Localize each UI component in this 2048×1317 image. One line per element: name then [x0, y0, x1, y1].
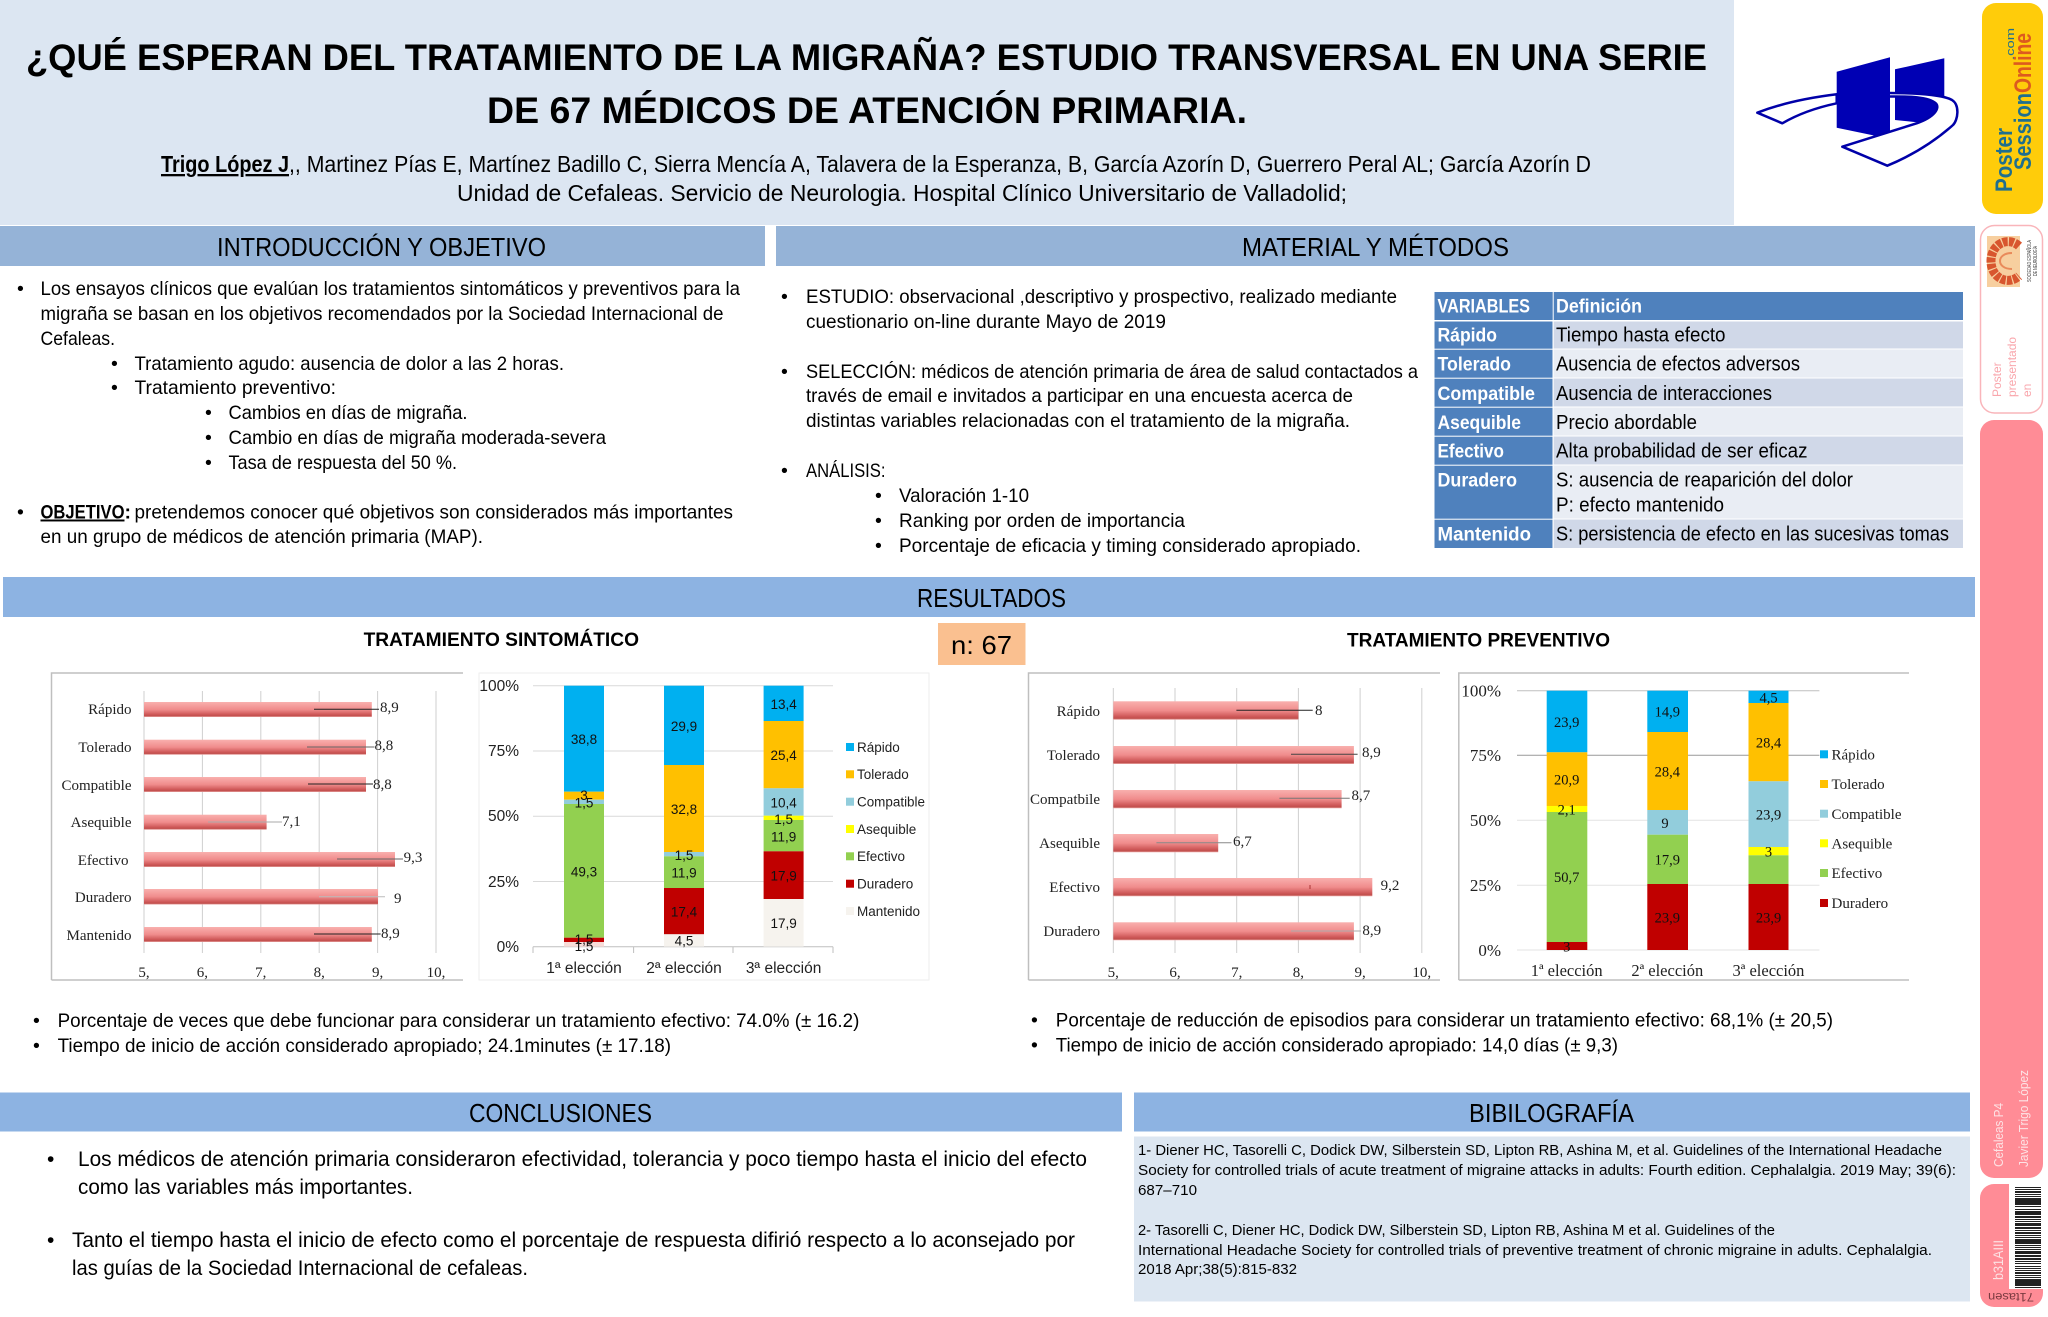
text block: conclusiones: Los médicos de atención primaria consideraron efectividad, tolerancia y poco tiempo hasta el inicio del efecto — [78, 1148, 1087, 1171]
bar chart: preventivo valoración: Duradero — [1043, 924, 1100, 940]
stacked bar chart: preventivo elección: 2,1 — [1558, 803, 1576, 819]
stacked bar chart: sintomático elección: 1,5 — [774, 812, 793, 827]
authors: Trigo López J — [161, 151, 289, 177]
stacked bar chart: sintomático elección: 29,9 — [671, 719, 697, 734]
text block: referencias — [1134, 1136, 1970, 1302]
table: variables: Alta probabilidad de ser eficaz — [1556, 441, 1808, 463]
panel: introducción y objetivo — [0, 226, 765, 548]
sidebar: poster session online badge: Session — [2010, 93, 2037, 170]
text block: introducción — [17, 278, 740, 548]
stacked bar chart: sintomático elección: 75% — [488, 743, 519, 760]
text block: introducción: • — [205, 402, 212, 424]
sidebar: session and author tab: Cefaleas P4 — [1991, 1103, 2006, 1167]
text block: referencias: 687–710 — [1138, 1183, 1197, 1199]
table: variables: Compatible — [1438, 383, 1535, 405]
text block: conclusiones: • — [47, 1148, 54, 1171]
callout: n 67 — [938, 623, 1026, 665]
text block: métodos: • — [781, 460, 788, 482]
sidebar: code tab with barcode: b31AIII — [1990, 1240, 2006, 1280]
sidebar: session and author tab: Javier Trigo López — [2016, 1070, 2031, 1167]
text block: introducción: Cambios en días de migraña. — [228, 402, 468, 424]
text: poster presentado en: en — [2020, 384, 2034, 397]
table: variables: Ausencia de interacciones — [1556, 383, 1772, 405]
stacked bar chart: sintomático elección: 49,3 — [571, 865, 597, 880]
text block: resultados preventivo: • — [1031, 1035, 1038, 1057]
sidebar: code tab with barcode — [1980, 1184, 2043, 1307]
bar chart: sintomático valoración: 8,8 — [374, 738, 393, 754]
stacked bar chart: preventivo elección: 3 — [1765, 845, 1772, 861]
icon: brain logo — [1987, 236, 2039, 287]
table: variables: S: persistencia de efecto en las sucesivas tomas — [1556, 524, 1949, 546]
text block: conclusiones: Tanto el tiempo hasta el inicio de efecto como el porcentaje de respuesta difirió respecto a lo aconsejado por — [72, 1229, 1075, 1252]
stacked bar chart: sintomático elección: 1,5 — [675, 848, 693, 863]
table: variables: VARIABLES — [1438, 296, 1530, 318]
bar chart: sintomático valoración: 6, — [197, 965, 208, 981]
heading: bibliografía: BIBILOGRAFÍA — [1469, 1098, 1635, 1128]
legend: Efectivo — [1832, 866, 1882, 882]
stacked bar chart: preventivo elección: 2ª elección — [1631, 961, 1703, 980]
stacked bar chart: preventivo elección: 50% — [1470, 811, 1501, 830]
text block: introducción: • — [111, 353, 118, 375]
bar chart: preventivo valoración: 9, — [1354, 965, 1366, 981]
stacked bar chart: preventivo elección: 1ª elección — [1531, 961, 1603, 980]
bar chart: preventivo valoración: 8, — [1293, 965, 1304, 981]
stacked bar chart: sintomático elección: 3ª elección — [746, 960, 821, 977]
text: poster presentado en: Poster — [1990, 362, 2004, 397]
stacked bar chart: sintomático elección: 2ª elección — [646, 960, 722, 977]
table: variables: Definición — [1556, 296, 1642, 318]
bar chart: preventivo valoración: Efectivo — [1049, 880, 1100, 896]
stacked bar chart: preventivo elección: 23,9 — [1756, 910, 1781, 926]
stacked bar chart: preventivo elección: 23,9 — [1554, 715, 1579, 731]
bar chart: sintomático valoración: Tolerado — [78, 740, 132, 756]
icon: brain logo: SOCIEDAD ESPAÑOLA — [2026, 240, 2033, 282]
bar chart: preventivo valoración: Rápido — [1057, 704, 1100, 720]
stacked bar chart: sintomático elección: 17,9 — [770, 869, 797, 884]
bar chart: sintomático valoración — [52, 673, 463, 981]
bar chart: preventivo valoración: 6,7 — [1233, 834, 1252, 850]
table: variables: Asequible — [1438, 412, 1521, 434]
stacked bar chart: sintomático elección: 3 — [580, 788, 588, 803]
stacked bar chart: sintomático elección: 25% — [488, 874, 519, 891]
table: variables: Efectivo — [1438, 441, 1504, 463]
stacked bar chart: sintomático elección: 17,9 — [770, 916, 797, 931]
stacked bar chart: sintomático elección: 11,9 — [771, 830, 796, 845]
text block: referencias: International Headache Society for controlled trials of preventive treatment of chronic migraine in adults. Cephalalgia. — [1138, 1243, 1932, 1259]
stacked bar chart: sintomático elección: 11,9 — [671, 866, 697, 881]
stacked bar chart: sintomático elección: 1,5 — [575, 939, 593, 954]
stacked bar chart: sintomático elección: 25,4 — [770, 748, 797, 763]
heading: introducción: INTRODUCCIÓN Y OBJETIVO — [217, 232, 546, 262]
heading: conclusiones: CONCLUSIONES — [469, 1098, 652, 1128]
text block: métodos: • — [875, 485, 882, 507]
text block: métodos: cuestionario on-line durante Mayo de 2019 — [806, 311, 1166, 333]
bar chart: sintomático valoración: Mantenido — [66, 928, 132, 944]
table: variables: Tolerado — [1438, 354, 1511, 376]
text block: conclusiones: • — [47, 1229, 54, 1252]
title: DE 67 MÉDICOS DE ATENCIÓN PRIMARIA. — [487, 89, 1247, 131]
bar chart: sintomático valoración: 9, — [372, 965, 383, 981]
panel: bibliografía — [1134, 1092, 1970, 1302]
legend: Efectivo — [857, 849, 905, 864]
sidebar: poster session online badge: .com — [2005, 28, 2017, 60]
stacked bar chart: sintomático elección: 10,4 — [770, 796, 797, 811]
bar chart: sintomático valoración: 10, — [427, 965, 445, 981]
text block: introducción: pretendemos conocer qué objetivos son considerados más importantes — [134, 502, 733, 524]
bar chart: sintomático valoración: 5, — [138, 965, 150, 981]
bar chart: preventivo valoración: 6, — [1169, 965, 1181, 981]
legend: Tolerado — [1832, 777, 1885, 793]
table: variables: Ausencia de efectos adversos — [1556, 354, 1800, 376]
heading: material y métodos — [776, 226, 1975, 266]
sidebar: session and author tab — [1980, 420, 2043, 1178]
text block: introducción: Los ensayos clínicos que evalúan los tratamientos sintomáticos y preventivos para la — [40, 278, 740, 300]
bar chart: sintomático valoración: 8,9 — [380, 700, 399, 716]
legend: Rápido — [857, 740, 900, 755]
stacked bar chart: sintomático elección: 1,5 — [575, 932, 593, 947]
sidebar: poster session online badge — [1982, 3, 2043, 214]
bar chart: sintomático valoración: Asequible — [71, 815, 132, 831]
text block: métodos: SELECCIÓN: médicos de atención primaria de área de salud contactados a — [806, 360, 1418, 383]
text block: métodos: Ranking por orden de importancia — [899, 510, 1185, 532]
text block: métodos: distintas variables relacionadas con el tratamiento de la migraña. — [806, 410, 1350, 432]
table: variables: Precio abordable — [1556, 412, 1697, 434]
title — [26, 36, 1707, 131]
bar chart: preventivo valoración: Asequible — [1039, 836, 1100, 852]
text block: introducción: migraña se basan en los objetivos recomendados por la Sociedad Internacional de — [40, 303, 724, 325]
stacked bar chart: sintomático elección: 1ª elección — [546, 960, 622, 977]
text block: introducción: : — [124, 502, 131, 524]
text block: introducción: OBJETIVO — [40, 502, 124, 524]
text block: métodos: • — [781, 361, 788, 383]
legend: Compatible — [857, 795, 925, 810]
stacked bar chart: sintomático elección: 17,4 — [671, 905, 698, 920]
stacked bar chart: sintomático elección: 32,8 — [671, 802, 697, 817]
bar chart: sintomático valoración: 8, — [314, 965, 325, 981]
sidebar: code tab with barcode: 71tasen — [1988, 1290, 2034, 1304]
stacked bar chart: sintomático elección: 13,4 — [770, 697, 797, 712]
legend: Asequible — [1832, 836, 1893, 852]
table: variables: P: efecto mantenido — [1556, 495, 1724, 517]
icon: brain logo: DE NEUROLOGÍA — [2032, 246, 2039, 276]
panel: conclusiones — [0, 1092, 1122, 1280]
bar chart: sintomático valoración: Efectivo — [78, 853, 128, 869]
legend: Tolerado — [857, 767, 909, 782]
bar chart: sintomático valoración: 9,3 — [404, 850, 422, 866]
text block: referencias: 2- Tasorelli C, Diener HC, Dodick DW, Silberstein SD, Lipton RB, Ashina M et al. Guidelines of the — [1138, 1223, 1775, 1239]
heading: introducción — [0, 226, 765, 266]
heading: resultados: RESULTADOS — [917, 583, 1066, 613]
heading: bibliografía — [1134, 1092, 1970, 1132]
text block: resultados preventivo: Tiempo de inicio de acción considerado apropiado: 14,0 días (± 9,3) — [1056, 1035, 1618, 1057]
text block: resultados sintomático: Tiempo de inicio de acción considerado apropiado; 24.1minutes (± 17.18) — [58, 1035, 671, 1057]
sidebar: presented at card — [1980, 226, 2042, 413]
heading: conclusiones — [0, 1092, 1122, 1132]
text block: métodos: ANÁLISIS: — [806, 459, 886, 482]
stacked bar chart: preventivo elección: 3ª elección — [1733, 961, 1804, 980]
callout: n 67: n: 67 — [951, 630, 1012, 660]
bar chart: sintomático valoración: 9 — [394, 891, 402, 907]
text block: introducción: • — [17, 502, 24, 524]
bar chart: preventivo valoración: Tolerado — [1047, 748, 1100, 764]
text block: introducción: • — [205, 452, 212, 474]
text block: resultados sintomático — [33, 1010, 859, 1057]
text block: introducción: • — [205, 427, 212, 449]
text block: métodos: • — [875, 535, 882, 557]
bar chart: sintomático valoración: 8,9 — [381, 926, 400, 942]
text block: introducción: • — [17, 278, 24, 300]
text: poster presentado en — [1990, 337, 2034, 397]
authors — [161, 151, 1591, 206]
stacked bar chart: sintomático elección — [479, 673, 929, 980]
stacked bar chart: sintomático elección: 0% — [497, 939, 519, 956]
stacked bar chart: preventivo elección: 25% — [1470, 876, 1501, 895]
bar chart: preventivo valoración: 8,9 — [1362, 745, 1381, 761]
heading: material y métodos: MATERIAL Y MÉTODOS — [1242, 232, 1509, 262]
bar chart: preventivo valoración: 5, — [1108, 965, 1119, 981]
barcode — [2015, 1187, 2041, 1288]
text block: resultados preventivo: Porcentaje de reducción de episodios para considerar un tratamiento efectivo: 68,1% (± 20,5) — [1056, 1010, 1833, 1032]
stacked bar chart: preventivo elección: 14,9 — [1655, 705, 1680, 721]
text block: conclusiones: las guías de la Sociedad Internacional de cefaleas. — [72, 1257, 528, 1280]
bar chart: sintomático valoración: 7, — [255, 965, 266, 981]
text block: resultados sintomático: • — [33, 1010, 40, 1032]
bar chart: preventivo valoración: Compatbile — [1030, 792, 1100, 808]
stacked bar chart: sintomático elección: 100% — [479, 678, 519, 695]
bar chart: preventivo valoración: 7, — [1231, 965, 1242, 981]
authors: Unidad de Cefaleas. Servicio de Neurologia. Hospital Clínico Universitario de Valladolid; — [457, 180, 1347, 206]
text block: introducción: Tratamiento preventivo: — [134, 377, 336, 399]
text: poster presentado en: presentado — [2005, 337, 2019, 397]
heading: tratamiento preventivo: TRATAMIENTO PREVENTIVO — [1347, 630, 1610, 652]
stacked bar chart: preventivo elección: 9 — [1661, 816, 1669, 832]
table: variables: Rápido — [1438, 325, 1497, 347]
table: variables: Mantenido — [1438, 524, 1531, 546]
icon: hospital logo — [1757, 57, 1957, 166]
text block: conclusiones: como las variables más importantes. — [78, 1176, 413, 1199]
bar chart: sintomático valoración: Rápido — [88, 702, 132, 718]
bar chart: preventivo valoración: 9,2 — [1381, 878, 1399, 894]
text block: introducción: Cambio en días de migraña moderada-severa — [228, 427, 606, 449]
bar chart: sintomático valoración: Duradero — [75, 890, 132, 906]
text block: métodos: Porcentaje de eficacia y timing considerado apropiado. — [899, 535, 1361, 557]
text block: métodos: • — [781, 286, 788, 308]
header panel — [0, 0, 1734, 225]
text block: introducción: • — [111, 377, 118, 399]
sidebar: poster session online badge: Poster — [1991, 128, 2018, 192]
stacked bar chart: preventivo elección: 17,9 — [1655, 853, 1680, 869]
legend: Rápido — [1832, 748, 1875, 764]
stacked bar chart: sintomático elección: 50% — [488, 808, 519, 825]
table: variables: S: ausencia de reaparición del dolor — [1556, 470, 1853, 492]
stacked bar chart: preventivo elección: 20,9 — [1554, 773, 1579, 789]
stacked bar chart: sintomático elección: 4,5 — [675, 934, 693, 949]
heading: tratamiento sintomático: TRATAMIENTO SINTOMÁTICO — [364, 628, 639, 651]
legend: Asequible — [857, 822, 916, 837]
bar chart: preventivo valoración — [1028, 673, 1440, 981]
stacked bar chart: sintomático elección: 38,8 — [571, 732, 597, 747]
authors: ,, Martinez Pías E, Martínez Badillo C, Sierra Mencía A, Talavera de la Esperanza, B, García Azorín D, Guerrero Peral AL; García Azorín D — [289, 151, 1591, 177]
stacked bar chart: preventivo elección: 23,9 — [1655, 910, 1680, 926]
stacked bar chart: preventivo elección: 4,5 — [1759, 690, 1778, 706]
table: variables: Duradero — [1438, 470, 1517, 492]
text block: introducción: Tasa de respuesta del 50 %. — [228, 452, 457, 474]
bar chart: preventivo valoración: 8 — [1315, 703, 1322, 719]
legend: Compatible — [1832, 807, 1902, 823]
text block: resultados sintomático: • — [33, 1035, 40, 1057]
text block: conclusiones — [47, 1148, 1087, 1280]
text block: resultados preventivo — [1031, 1010, 1833, 1057]
stacked bar chart: preventivo elección: 23,9 — [1756, 808, 1781, 824]
stacked bar chart: sintomático elección: 1,5 — [575, 796, 593, 811]
text block: introducción: Cefaleas. — [40, 328, 115, 350]
bar chart: sintomático valoración: 7,1 — [282, 814, 301, 830]
text block: referencias: Society for controlled trials of acute treatment of migraine attacks in adults: Fourth edition. Cephalalgia. 2019 May; 39(6): — [1138, 1163, 1956, 1179]
title: ¿QUÉ ESPERAN DEL TRATAMIENTO DE LA MIGRAÑA? ESTUDIO TRANSVERSAL EN UNA SERIE — [26, 36, 1707, 78]
stacked bar chart: preventivo elección: 3 — [1563, 940, 1570, 956]
legend — [846, 740, 925, 919]
text block: métodos: Valoración 1-10 — [899, 485, 1029, 507]
stacked bar chart: preventivo elección: 50,7 — [1554, 870, 1579, 886]
bar chart: preventivo valoración: 8,7 — [1352, 788, 1371, 804]
text block: métodos — [781, 286, 1418, 557]
legend: Duradero — [1832, 896, 1888, 912]
text block: introducción: en un grupo de médicos de atención primaria (MAP). — [40, 526, 483, 548]
heading: resultados — [3, 577, 1975, 617]
stacked bar chart: preventivo elección: 100% — [1461, 682, 1501, 700]
stacked bar chart: preventivo elección: 75% — [1470, 746, 1501, 765]
text block: resultados sintomático: Porcentaje de veces que debe funcionar para considerar un tratamiento efectivo: 74.0% (± 16.2) — [58, 1010, 859, 1032]
bar chart: sintomático valoración: 8,8 — [373, 777, 392, 793]
table: variables: Tiempo hasta efecto — [1556, 325, 1726, 347]
text block: resultados preventivo: • — [1031, 1010, 1038, 1032]
text block: métodos: • — [875, 510, 882, 532]
panel: material y métodos — [776, 226, 1975, 557]
bar chart: preventivo valoración: 8,9 — [1362, 923, 1381, 939]
text block: introducción: Tratamiento agudo: ausencia de dolor a las 2 horas. — [134, 353, 564, 375]
stacked bar chart: preventivo elección: 0% — [1478, 941, 1501, 960]
stacked bar chart: preventivo elección — [1459, 673, 1909, 980]
table: variables — [1434, 292, 1963, 548]
sidebar: poster session online badge: Online — [2010, 33, 2037, 93]
legend: Duradero — [857, 877, 913, 892]
bar chart: preventivo valoración: 10, — [1412, 965, 1431, 981]
stacked bar chart: preventivo elección: 28,4 — [1655, 765, 1681, 781]
bar chart: sintomático valoración: Compatible — [62, 778, 132, 794]
legend — [1820, 748, 1902, 912]
stacked bar chart: preventivo elección: 28,4 — [1756, 736, 1782, 752]
text block: métodos: ESTUDIO: observacional ,descriptivo y prospectivo, realizado mediante — [806, 286, 1397, 308]
text block: referencias: 2018 Apr;38(5):815-832 — [1138, 1262, 1297, 1278]
text block: métodos: través de email e invitados a participar en una encuesta acerca de — [806, 385, 1353, 407]
text block: referencias: 1- Diener HC, Tasorelli C, Dodick DW, Silberstein SD, Lipton RB, Ashina M, et al. Guidelines of the International Headache — [1138, 1143, 1942, 1159]
legend: Mantenido — [857, 904, 920, 919]
